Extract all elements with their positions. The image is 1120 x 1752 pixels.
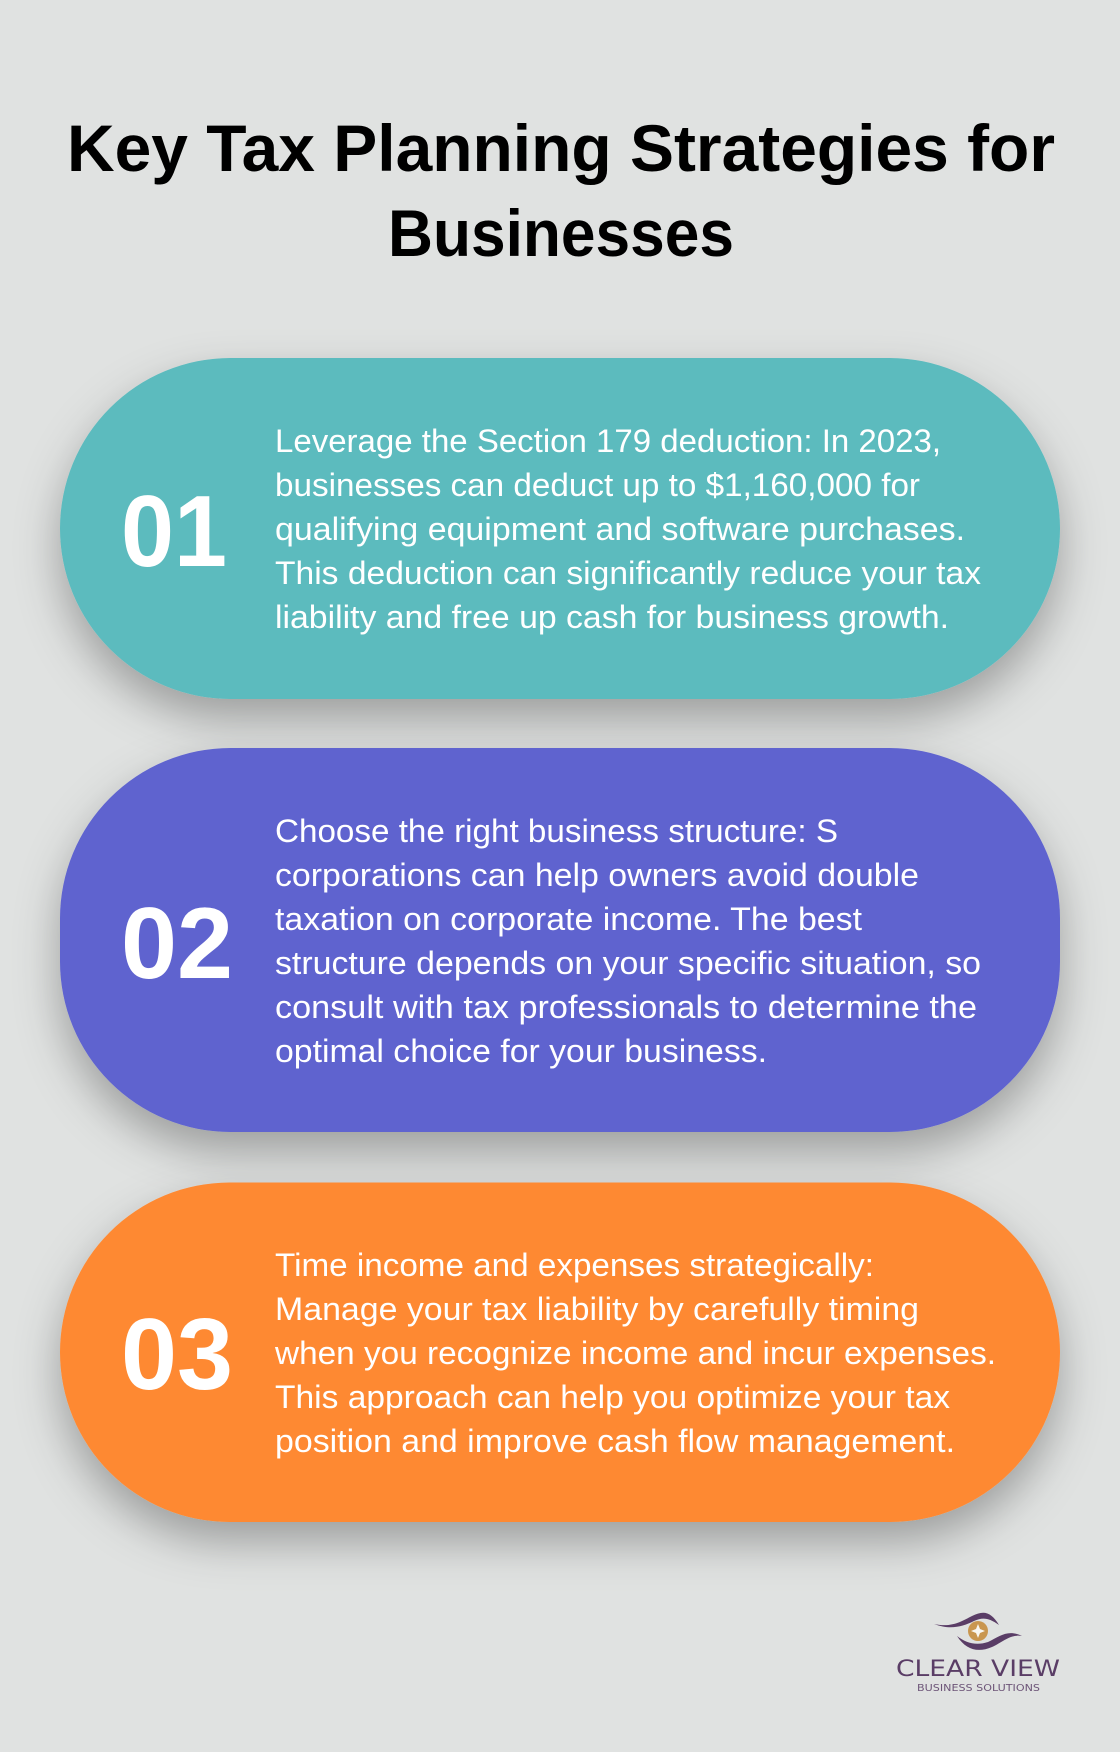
text block: business structure: taxation on corporate income. The best — [275, 901, 862, 937]
panel: strategy 02 — [60, 748, 1060, 1132]
text block: business structure: structure depends on your specific situation, so — [275, 945, 981, 981]
panel: strategy 01 — [60, 358, 1060, 699]
text block: section 179 deduction: liability and free up cash for business growth. — [275, 599, 949, 635]
number 01: 01 — [121, 476, 227, 588]
text block: section 179 deduction: Leverage the Section 179 deduction: In 2023, — [275, 423, 941, 459]
text block: timing income and expenses: This approach can help you optimize your tax — [275, 1379, 950, 1415]
text block: business structure: corporations can help owners avoid double — [275, 857, 919, 893]
logo: Clear View Business Solutions — [896, 1613, 1060, 1694]
text block: business structure — [275, 813, 981, 1069]
text block: timing income and expenses: Time income and expenses strategically: — [275, 1247, 874, 1283]
logo: Clear View Business Solutions: BUSINESS SOLUTIONS — [917, 1683, 1040, 1694]
text block: timing income and expenses — [274, 1247, 996, 1459]
teal pill background — [60, 358, 1060, 699]
title — [67, 111, 1055, 270]
text block: section 179 deduction: qualifying equipment and software purchases. — [275, 511, 965, 547]
orange pill background — [60, 1182, 1060, 1522]
text block: section 179 deduction: This deduction can significantly reduce your tax — [275, 555, 981, 591]
number 02: 02 — [121, 888, 233, 1000]
text block: section 179 deduction: businesses can deduct up to $1,160,000 for — [275, 467, 920, 503]
title: Businesses — [388, 196, 734, 270]
panel: strategy 03 — [60, 1182, 1060, 1522]
text block: business structure: Choose the right business structure: S — [275, 813, 838, 849]
icon: eye — [934, 1613, 1022, 1650]
text block: timing income and expenses: Manage your tax liability by carefully timing — [275, 1291, 919, 1327]
number 03: 03 — [121, 1299, 233, 1411]
text block: timing income and expenses: position and improve cash flow management. — [275, 1423, 955, 1459]
purple pill background — [60, 748, 1060, 1132]
text block: timing income and expenses: when you recognize income and incur expenses. — [274, 1335, 996, 1371]
logo: Clear View Business Solutions: CLEAR VIEW — [896, 1657, 1060, 1682]
title: Key Tax Planning Strategies for — [67, 111, 1055, 185]
text block: business structure: consult with tax professionals to determine the — [275, 989, 977, 1025]
text block: business structure: optimal choice for your business. — [275, 1033, 767, 1069]
text block: section 179 deduction — [275, 423, 981, 635]
